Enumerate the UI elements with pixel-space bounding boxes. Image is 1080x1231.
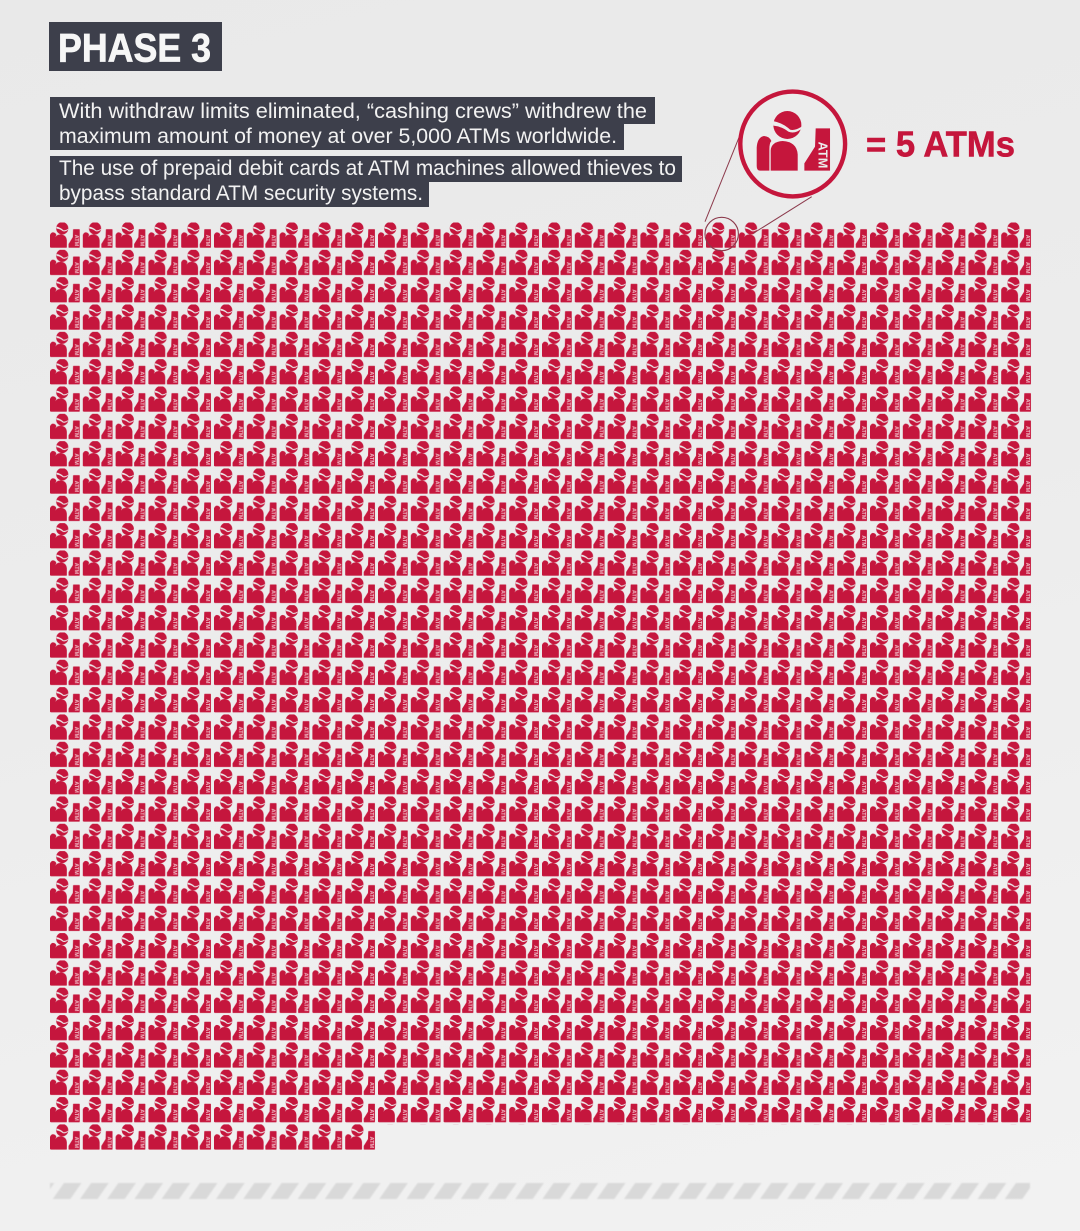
text block: cashing crews: With withdraw limits eliminated, “cashing crews” withdrew the bbox=[59, 100, 647, 123]
text block: prepaid debit cards: bypass standard ATM security systems. bbox=[59, 182, 423, 205]
footer hazard stripe bbox=[50, 1183, 1030, 1199]
text block: cashing crews: maximum amount of money at over 5,000 ATMs worldwide. bbox=[59, 125, 617, 148]
callout: magnifier lines and small circle bbox=[705, 137, 812, 251]
text block: prepaid debit cards bbox=[50, 156, 682, 207]
pictogram grid: 1000 icons, each equal to 5 ATMs bbox=[50, 222, 1034, 1151]
legend icon: thief and ATM in circle: ATM bbox=[816, 142, 831, 168]
legend label: equals 5 ATMs: = 5 ATMs bbox=[866, 124, 1015, 164]
heading: phase 3: PHASE 3 bbox=[58, 26, 211, 70]
legend icon: thief and ATM in circle bbox=[740, 92, 845, 196]
text block: prepaid debit cards: The use of prepaid debit cards at ATM machines allowed thieves to bbox=[59, 157, 676, 180]
text block: cashing crews bbox=[50, 97, 655, 150]
